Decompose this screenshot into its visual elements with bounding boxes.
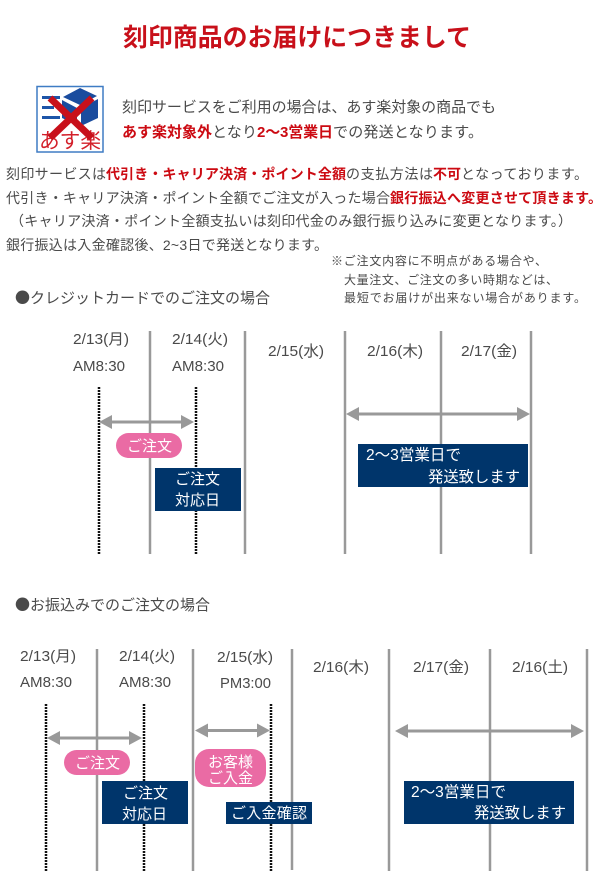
box: shipping note [358, 444, 528, 487]
side note: 大量注文、ご注文の多い時期などは、 [344, 272, 558, 287]
payment notes: となっております。 [461, 166, 588, 182]
arrow: shipping period [346, 407, 530, 421]
badge: order: ご注文 [127, 438, 172, 455]
payment notes [6, 166, 600, 253]
date labels: 2/14(火) [172, 331, 228, 348]
heading: bank transfer: ●お振込みでのご注文の場合 [15, 594, 210, 615]
payment notes: 不可 [433, 166, 461, 182]
date labels: PM3:00 [220, 675, 271, 692]
payment notes: 銀行振込は入金確認後、2~3日で発送となります。 [6, 237, 328, 253]
box: order handling day: ご注文 [175, 471, 220, 488]
box: shipping note: 発送致します [474, 805, 566, 822]
intro text: となり [212, 124, 257, 141]
date labels [73, 331, 517, 375]
badge: customer payment: お客様 [208, 754, 253, 771]
date labels: 2/15(水) [217, 649, 273, 666]
box: order handling day [155, 468, 241, 511]
box: order handling day: 対応日 [175, 492, 220, 509]
date labels: AM8:30 [20, 674, 72, 691]
box: payment confirmed [226, 802, 312, 824]
badge: customer payment [195, 749, 266, 787]
arrow: payment period [195, 724, 270, 738]
payment notes: 代引き・キャリア決済・ポイント全額 [106, 166, 346, 182]
intro text: での発送となります。 [333, 124, 483, 141]
side note: ※ご注文内容に不明点がある場合や、 [331, 253, 547, 268]
date labels: 2/16(木) [313, 659, 369, 676]
date labels: 2/16(土) [512, 659, 568, 676]
badge: order [64, 750, 130, 775]
date labels: AM8:30 [73, 358, 125, 375]
payment notes: （キャリア決済・ポイント全額支払いは刻印代金のみ銀行振り込みに変更となります。） [10, 213, 572, 229]
chart: bank transfer timeline [20, 648, 587, 871]
arrow: order period [47, 731, 142, 745]
date labels: 2/15(水) [268, 343, 324, 360]
payment notes: の支払方法は [346, 166, 433, 182]
badge: customer payment: ご入金 [208, 770, 253, 787]
date labels: AM8:30 [119, 674, 171, 691]
date labels: 2/17(金) [461, 343, 517, 360]
date labels: 2/14(火) [119, 648, 175, 665]
box: shipping note [404, 781, 574, 824]
payment notes: 代引き・キャリア決済・ポイント全額でご注文が入った場合 [6, 190, 390, 206]
payment notes: 刻印サービスは [6, 166, 106, 182]
box: shipping note: 2〜3営業日で [366, 447, 461, 464]
heading: credit card: ●クレジットカードでのご注文の場合 [15, 287, 270, 308]
intro text: 2〜3営業日 [257, 123, 333, 141]
intro text: あす楽対象外 [122, 123, 212, 141]
badge: order [116, 433, 182, 458]
icon: asu-raku crossed out [37, 86, 103, 153]
arrow: shipping period [395, 724, 584, 738]
box: payment confirmed: ご入金確認 [231, 805, 307, 822]
box: order handling day: 対応日 [122, 806, 167, 823]
date labels: 2/13(月) [20, 648, 76, 665]
intro text: 刻印サービスをご利用の場合は、あす楽対象の商品でも [122, 99, 496, 116]
arrow: order period [99, 415, 194, 429]
box: order handling day [102, 781, 188, 824]
chart: credit card timeline [73, 331, 531, 554]
icon: asu-raku crossed out: あす楽 [39, 130, 101, 153]
box: order handling day: ご注文 [123, 785, 168, 802]
intro text [122, 99, 496, 141]
date labels: 2/17(金) [413, 659, 469, 676]
box: shipping note: 発送致します [428, 469, 520, 486]
badge: order: ご注文 [75, 755, 120, 772]
title: 刻印商品のお届けにつきまして [123, 24, 471, 52]
date labels: 2/16(木) [367, 343, 423, 360]
box: shipping note: 2〜3営業日で [411, 784, 506, 801]
date labels: AM8:30 [172, 358, 224, 375]
payment notes: 銀行振込へ変更させて頂きます。 [390, 190, 600, 206]
date labels [20, 648, 568, 692]
date labels: 2/13(月) [73, 331, 129, 348]
side note [331, 253, 586, 305]
side note: 最短でお届けが出来ない場合があります。 [344, 290, 586, 305]
